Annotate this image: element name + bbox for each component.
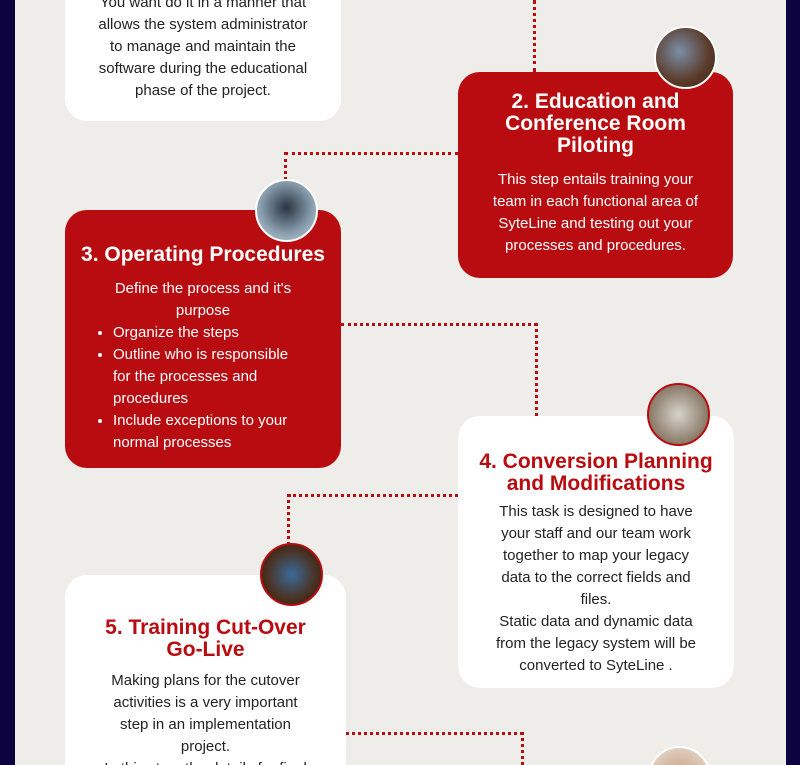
text: step 2 body: team in each functional area of [493,193,698,210]
text: step 2 body: processes and procedures. [505,237,686,254]
text: step 1 body [98,0,308,99]
text: step 5 body [104,672,307,765]
text: step 5 body: step in an implementation [120,716,291,733]
text: step 1 body: to manage and maintain the [110,38,296,55]
text: step 4 body: files. [581,591,611,608]
icon: photo 4 [647,383,710,446]
text: step 2 body [493,171,698,254]
text: step 3 body: normal processes [113,434,231,451]
text: step 4 body: This task is designed to have [499,503,693,520]
icon: photo 6 [650,746,708,765]
text: step 4 body: data to the correct fields and [501,569,691,586]
text: step 4 body: Static data and dynamic data [499,613,693,630]
heading: step 2: 2. Education and [511,90,680,113]
panel: step 3 [65,210,341,468]
heading: step 2: Conference Room [505,112,686,135]
text: step 2 body: This step entails training your [498,171,693,188]
text: step 1 body: phase of the project. [135,82,271,99]
text: step 4 body: together to map your legacy [503,547,689,564]
text: step 3 body: Outline who is responsible [113,346,288,363]
text: step 1 body: software during the educational [99,60,307,77]
text: step 3 body: procedures [113,390,188,407]
text: step 3 body: Organize the steps [113,324,239,341]
text: step 2 body: SyteLine and testing out your [498,215,693,232]
text: step 3 body: Define the process and it's [115,280,291,297]
panel: step 4 [458,416,734,688]
heading: step 5: Go-Live [166,638,245,661]
heading: step 5: 5. Training Cut-Over [105,616,306,639]
text: step 4 body: your staff and our team work [501,525,691,542]
text: step 3 body: for the processes and [113,368,257,385]
text: step 3 body: Include exceptions to your [113,412,287,429]
text: step 5 body: Making plans for the cutover [111,672,300,689]
text: step 3 body [98,280,291,451]
icon: photo 5 [260,543,323,606]
heading: step 4 [479,450,713,495]
panel: step 5 [65,575,346,765]
text: step 1 body: allows the system administrator [98,16,308,33]
heading: step 4: and Modifications [507,472,685,495]
heading: step 2: Piloting [557,134,634,157]
heading: step 4: 4. Conversion Planning [479,450,713,473]
heading: step 2 [505,90,686,157]
text: step 4 body: from the legacy system will be [496,635,696,652]
heading: step 3: 3. Operating Procedures [81,243,325,266]
icon: photo 3 [255,179,318,242]
text: step 4 body: converted to SyteLine . [519,657,673,674]
panel: step 1 [65,0,341,121]
text: step 3 body: purpose [176,302,230,319]
text: step 4 body [496,503,696,674]
text: step 5 body: project. [181,738,230,755]
icon: photo 2 [654,26,717,89]
heading: step 5 [105,616,306,661]
text: step 5 body: activities is a very important [113,694,298,711]
panel: step 2 [458,72,733,278]
